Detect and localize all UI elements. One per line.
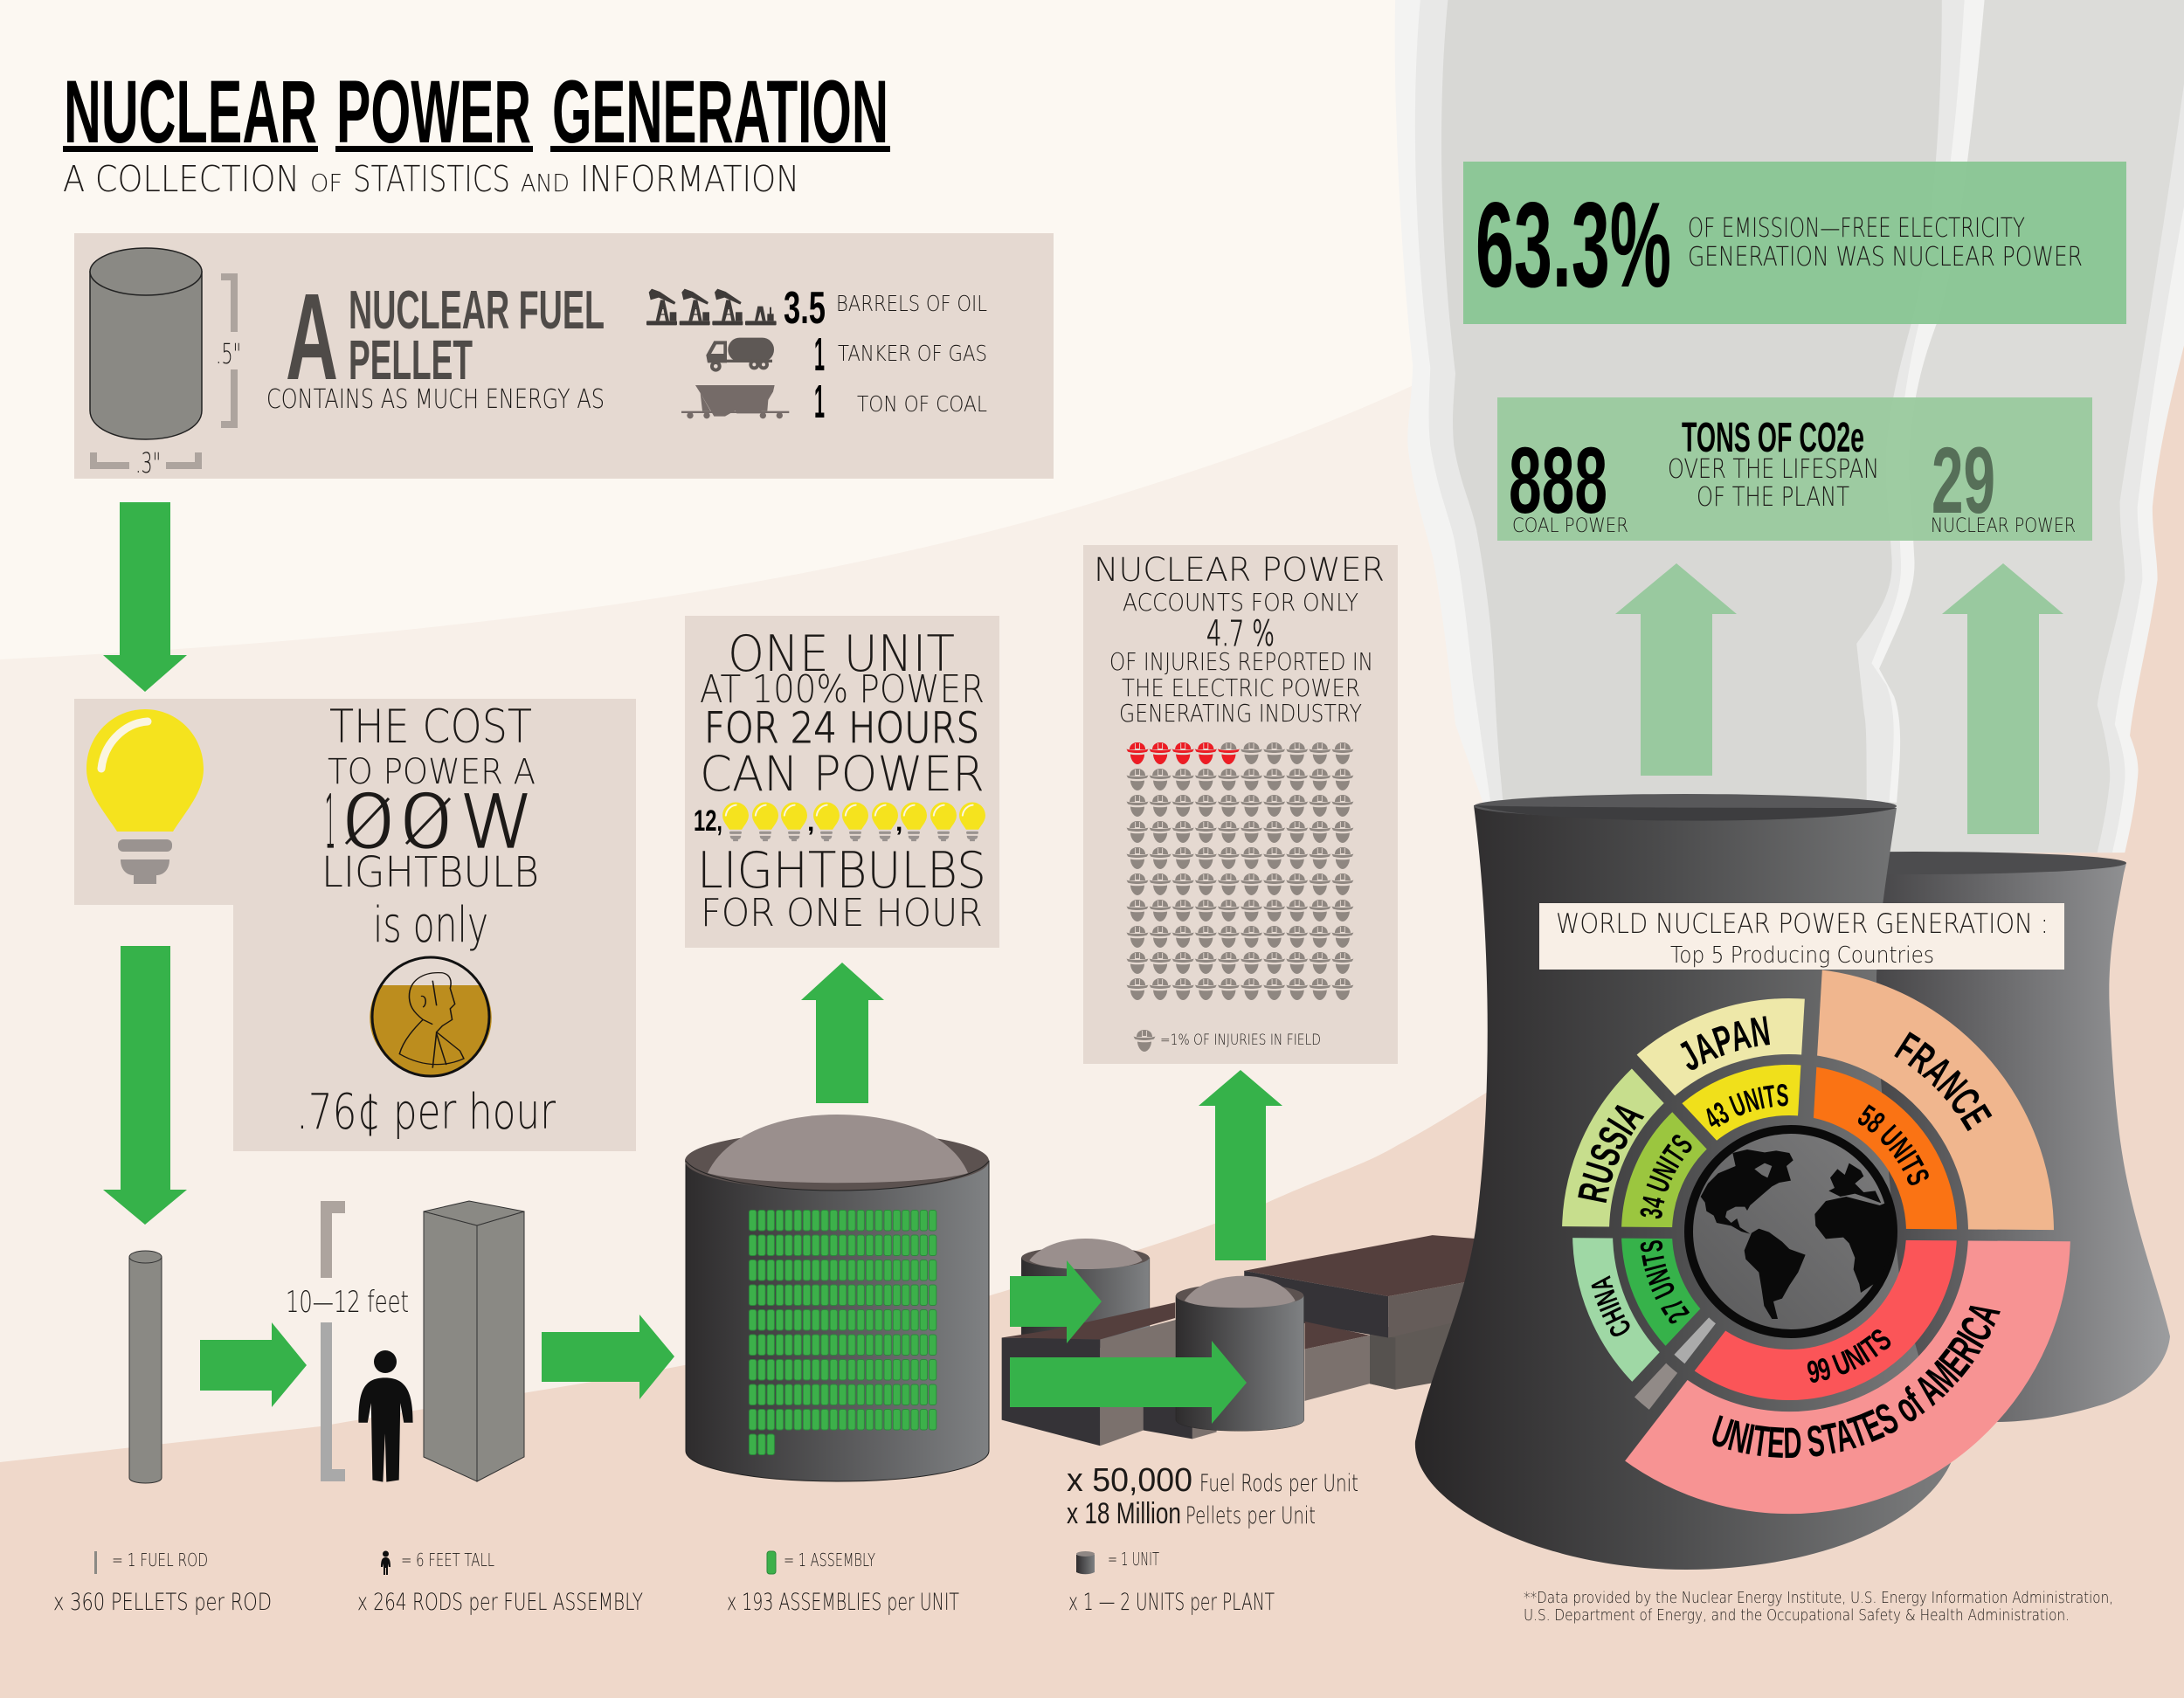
heading a nuclear fuel pellet: CONTAINS AS MUCH ENERGY AS <box>266 384 605 415</box>
one unit text <box>700 625 985 802</box>
cost text <box>321 701 539 954</box>
injuries text: THE ELECTRIC POWER <box>1122 673 1360 702</box>
lightbulb number row: , <box>807 808 814 837</box>
lightbulb number row: , <box>895 808 902 837</box>
injuries text: 4.7 % <box>1206 614 1275 654</box>
one unit text: AT 100% POWER <box>700 667 985 712</box>
country labels: RUSSIA <box>1578 1104 1644 1204</box>
icon: fuel rod <box>129 1251 162 1483</box>
icon: globe <box>1689 1129 1898 1334</box>
stat 888 coal: 888 <box>1509 427 1607 533</box>
panel: one unit <box>685 616 999 948</box>
cost per hour: .76¢ per hour <box>296 1084 556 1141</box>
label: assemblies per unit: x 193 ASSEMBLIES per UNIT <box>727 1589 959 1616</box>
title <box>63 62 890 162</box>
tanker stat <box>814 328 987 381</box>
building: middle block <box>1304 1322 1370 1401</box>
segment: Japan inner <box>1693 1090 1800 1127</box>
segment: Russia outer <box>1586 1081 1653 1232</box>
height bracket 10-12 feet <box>286 1201 409 1481</box>
panel: cost of lightbulb <box>74 699 636 1151</box>
dimension bracket width: .3" <box>135 446 161 480</box>
emission free text <box>1688 213 2083 273</box>
country labels: UNITED STATES of AMERICA <box>1712 1305 2001 1459</box>
stat 888 coal: COAL POWER <box>1512 515 1628 537</box>
segment: other outer <box>1645 1375 1669 1396</box>
segment: Russia inner <box>1647 1127 1693 1232</box>
arrow: plant to injuries panel <box>1199 1070 1282 1260</box>
label: fuel rods per unit: Fuel Rods per Unit <box>1199 1470 1358 1497</box>
heading tons of CO2e: OVER THE LIFESPAN <box>1668 454 1879 485</box>
segment: other inner <box>1688 1333 1704 1347</box>
stat 29 nuclear: NUCLEAR POWER <box>1931 515 2076 537</box>
heading a nuclear fuel pellet: NUCLEAR FUEL <box>349 280 605 341</box>
coal stat <box>814 376 987 428</box>
segment: France outer <box>1807 1011 2011 1232</box>
world generation heading <box>1539 903 2064 970</box>
lightbulb number row <box>694 802 985 841</box>
cost text: is only <box>373 897 488 954</box>
height bracket 10-12 feet: 10—12 feet <box>286 1285 409 1320</box>
arrow: to small unit <box>1010 1260 1102 1343</box>
arrow: rod to assembly <box>200 1322 307 1407</box>
subtitle: A COLLECTION <box>63 158 300 200</box>
title: POWER <box>336 62 531 162</box>
emission free text: OF EMISSION—FREE ELECTRICITY <box>1688 213 2025 244</box>
small reactor unit 1 <box>1021 1239 1150 1348</box>
icon: reactor unit cylinder <box>685 1115 989 1481</box>
subtitle: INFORMATION <box>580 158 799 200</box>
country labels <box>1578 1016 2001 1459</box>
subtitle: AND <box>521 169 570 197</box>
stat 29 nuclear: 29 <box>1932 427 1995 533</box>
icon: person <box>358 1350 413 1482</box>
one unit text: CAN POWER <box>700 746 985 802</box>
label: fuel rods per unit <box>1067 1462 1358 1499</box>
lightbulbs for one hour: FOR ONE HOUR <box>701 891 983 935</box>
cost text: 00 <box>340 779 455 865</box>
country labels: FRANCE <box>1894 1032 1992 1132</box>
arrow: pellet to lightbulb <box>103 502 187 692</box>
dimension bracket width <box>90 446 202 480</box>
big stat 63.3%: 63.3% <box>1476 177 1671 313</box>
building: left block <box>1002 1302 1217 1446</box>
heading a nuclear fuel pellet <box>266 267 605 415</box>
heading tons of CO2e <box>1668 415 1879 513</box>
country labels: 34 UNITS <box>1641 1135 1691 1219</box>
legend: assembly: = 1 ASSEMBLY <box>784 1550 875 1570</box>
lightbulbs for one hour <box>697 842 986 935</box>
arrow: up from front tower <box>1615 563 1737 776</box>
coal stat: TON OF COAL <box>857 391 987 417</box>
panel: 63.3% emission free <box>1463 162 2126 324</box>
one unit text: FOR 24 HOURS <box>704 704 979 753</box>
legend: fuel rod <box>94 1550 208 1574</box>
data source note <box>1524 1589 2113 1625</box>
country labels: 99 UNITS <box>1807 1329 1890 1383</box>
icon: coal hopper car <box>681 385 789 418</box>
cost text: W <box>460 779 534 865</box>
oil stat: BARRELS OF OIL <box>836 291 987 316</box>
heading tons of CO2e: OF THE PLANT <box>1697 482 1849 513</box>
building: right slab <box>1244 1235 1496 1338</box>
icon: oil pumps <box>646 289 777 325</box>
icon: tanker truck <box>706 338 774 372</box>
arrow: unit to one unit panel <box>801 963 884 1103</box>
legend: unit <box>1076 1549 1159 1574</box>
chart: top five countries donut <box>1562 973 2055 1502</box>
dimension bracket height: .5" <box>216 337 241 370</box>
injuries text: ACCOUNTS FOR ONLY <box>1123 588 1358 617</box>
rising arrows <box>1615 563 2063 834</box>
tanker stat: TANKER OF GAS <box>838 341 987 366</box>
legend: assembly <box>767 1550 875 1574</box>
helmets chart <box>1127 742 1353 1000</box>
injuries text: GENERATING INDUSTRY <box>1119 699 1362 728</box>
country labels: CHINA <box>1592 1275 1630 1336</box>
arrow: to plant <box>1010 1341 1247 1424</box>
segment: USA inner <box>1704 1232 1932 1375</box>
lightbulbs for one hour: LIGHTBULBS <box>697 842 986 900</box>
panel: injuries <box>1083 545 1398 1064</box>
oil stat <box>784 283 987 334</box>
legend: person <box>381 1550 494 1575</box>
panel: tons of CO2e <box>1497 397 2092 541</box>
front cooling tower <box>1415 794 1952 1570</box>
panel: nuclear fuel pellet <box>74 233 1054 480</box>
tanker stat: 1 <box>814 328 825 381</box>
segment: Japan outer <box>1651 1026 1805 1080</box>
subtitle: STATISTICS <box>353 158 510 200</box>
arrow: lightbulb to fuel rod <box>103 946 187 1225</box>
smoke plumes <box>1395 0 2184 852</box>
heading tons of CO2e: TONS OF CO2e <box>1682 415 1864 461</box>
country labels: JAPAN <box>1680 1016 1770 1070</box>
segment: China inner <box>1647 1232 1688 1333</box>
label: fuel rods per unit: x 50,000 <box>1067 1462 1192 1499</box>
label: units per plant: x 1 — 2 UNITS per PLANT <box>1068 1589 1275 1616</box>
subtitle: OF <box>310 169 342 197</box>
one unit text: ONE UNIT <box>728 625 955 683</box>
arrow: assembly to reactor unit <box>542 1315 674 1399</box>
legend: fuel rod: = 1 FUEL ROD <box>112 1550 208 1570</box>
small reactor unit 2 <box>1176 1276 1304 1431</box>
oil stat: 3.5 <box>784 283 826 334</box>
cost text: LIGHTBULB <box>321 848 539 897</box>
label: pellets per rod: x 360 PELLETS per ROD <box>53 1589 272 1616</box>
cost text: TO POWER A <box>328 752 536 792</box>
cost text: THE COST <box>329 701 532 754</box>
label: rods per assembly: x 264 RODS per FUEL ASSEMBLY <box>357 1589 643 1616</box>
label: pellets per unit <box>1067 1497 1316 1530</box>
country labels: 27 UNITS <box>1641 1240 1690 1324</box>
icon: penny <box>370 957 492 1076</box>
injuries text <box>1094 551 1385 728</box>
title: GENERATION <box>552 62 888 162</box>
injuries text: OF INJURIES REPORTED IN <box>1109 647 1373 676</box>
assemblies grid <box>749 1210 937 1455</box>
dimension bracket height <box>216 273 241 428</box>
country labels: 58 UNITS <box>1858 1104 1929 1185</box>
title: NUCLEAR <box>64 62 317 162</box>
segment: France inner <box>1800 1090 1932 1232</box>
stat 29 nuclear <box>1931 427 2076 537</box>
power plant buildings <box>1002 1235 1496 1446</box>
world generation heading: WORLD NUCLEAR POWER GENERATION : <box>1556 908 2049 940</box>
icon: lightbulb <box>86 709 204 884</box>
subtitle <box>63 158 799 200</box>
data source note: U.S. Department of Energy, and the Occupational Safety & Health Administration. <box>1524 1606 2070 1625</box>
segment: China outer <box>1593 1232 1649 1370</box>
back cooling tower <box>1704 852 2170 1422</box>
building: lower right block <box>1370 1308 1496 1390</box>
legend: unit: = 1 UNIT <box>1108 1549 1159 1570</box>
injuries text: NUCLEAR POWER <box>1094 551 1385 589</box>
coal stat: 1 <box>814 376 825 428</box>
helmet legend: =1% OF INJURIES IN FIELD <box>1160 1032 1321 1049</box>
legend: person: = 6 FEET TALL <box>401 1550 494 1570</box>
label: pellets per unit: x 18 Million <box>1067 1497 1181 1530</box>
lightbulb number row: 12, <box>694 804 722 838</box>
country labels: 43 UNITS <box>1706 1084 1788 1127</box>
helmet legend <box>1134 1030 1321 1052</box>
heading a nuclear fuel pellet: A <box>286 267 338 405</box>
icon: fuel assembly box <box>424 1201 524 1481</box>
segment: USA outer <box>1652 1232 2020 1463</box>
cost text: 1 <box>325 779 335 865</box>
label: pellets per unit: Pellets per Unit <box>1185 1502 1316 1529</box>
world generation heading: Top 5 Producing Countries <box>1670 942 1934 969</box>
icon: fuel pellet cylinder <box>90 248 202 439</box>
arrow: up from back tower <box>1942 563 2063 834</box>
heading a nuclear fuel pellet: PELLET <box>349 328 473 391</box>
emission free text: GENERATION WAS NUCLEAR POWER <box>1688 242 2083 273</box>
